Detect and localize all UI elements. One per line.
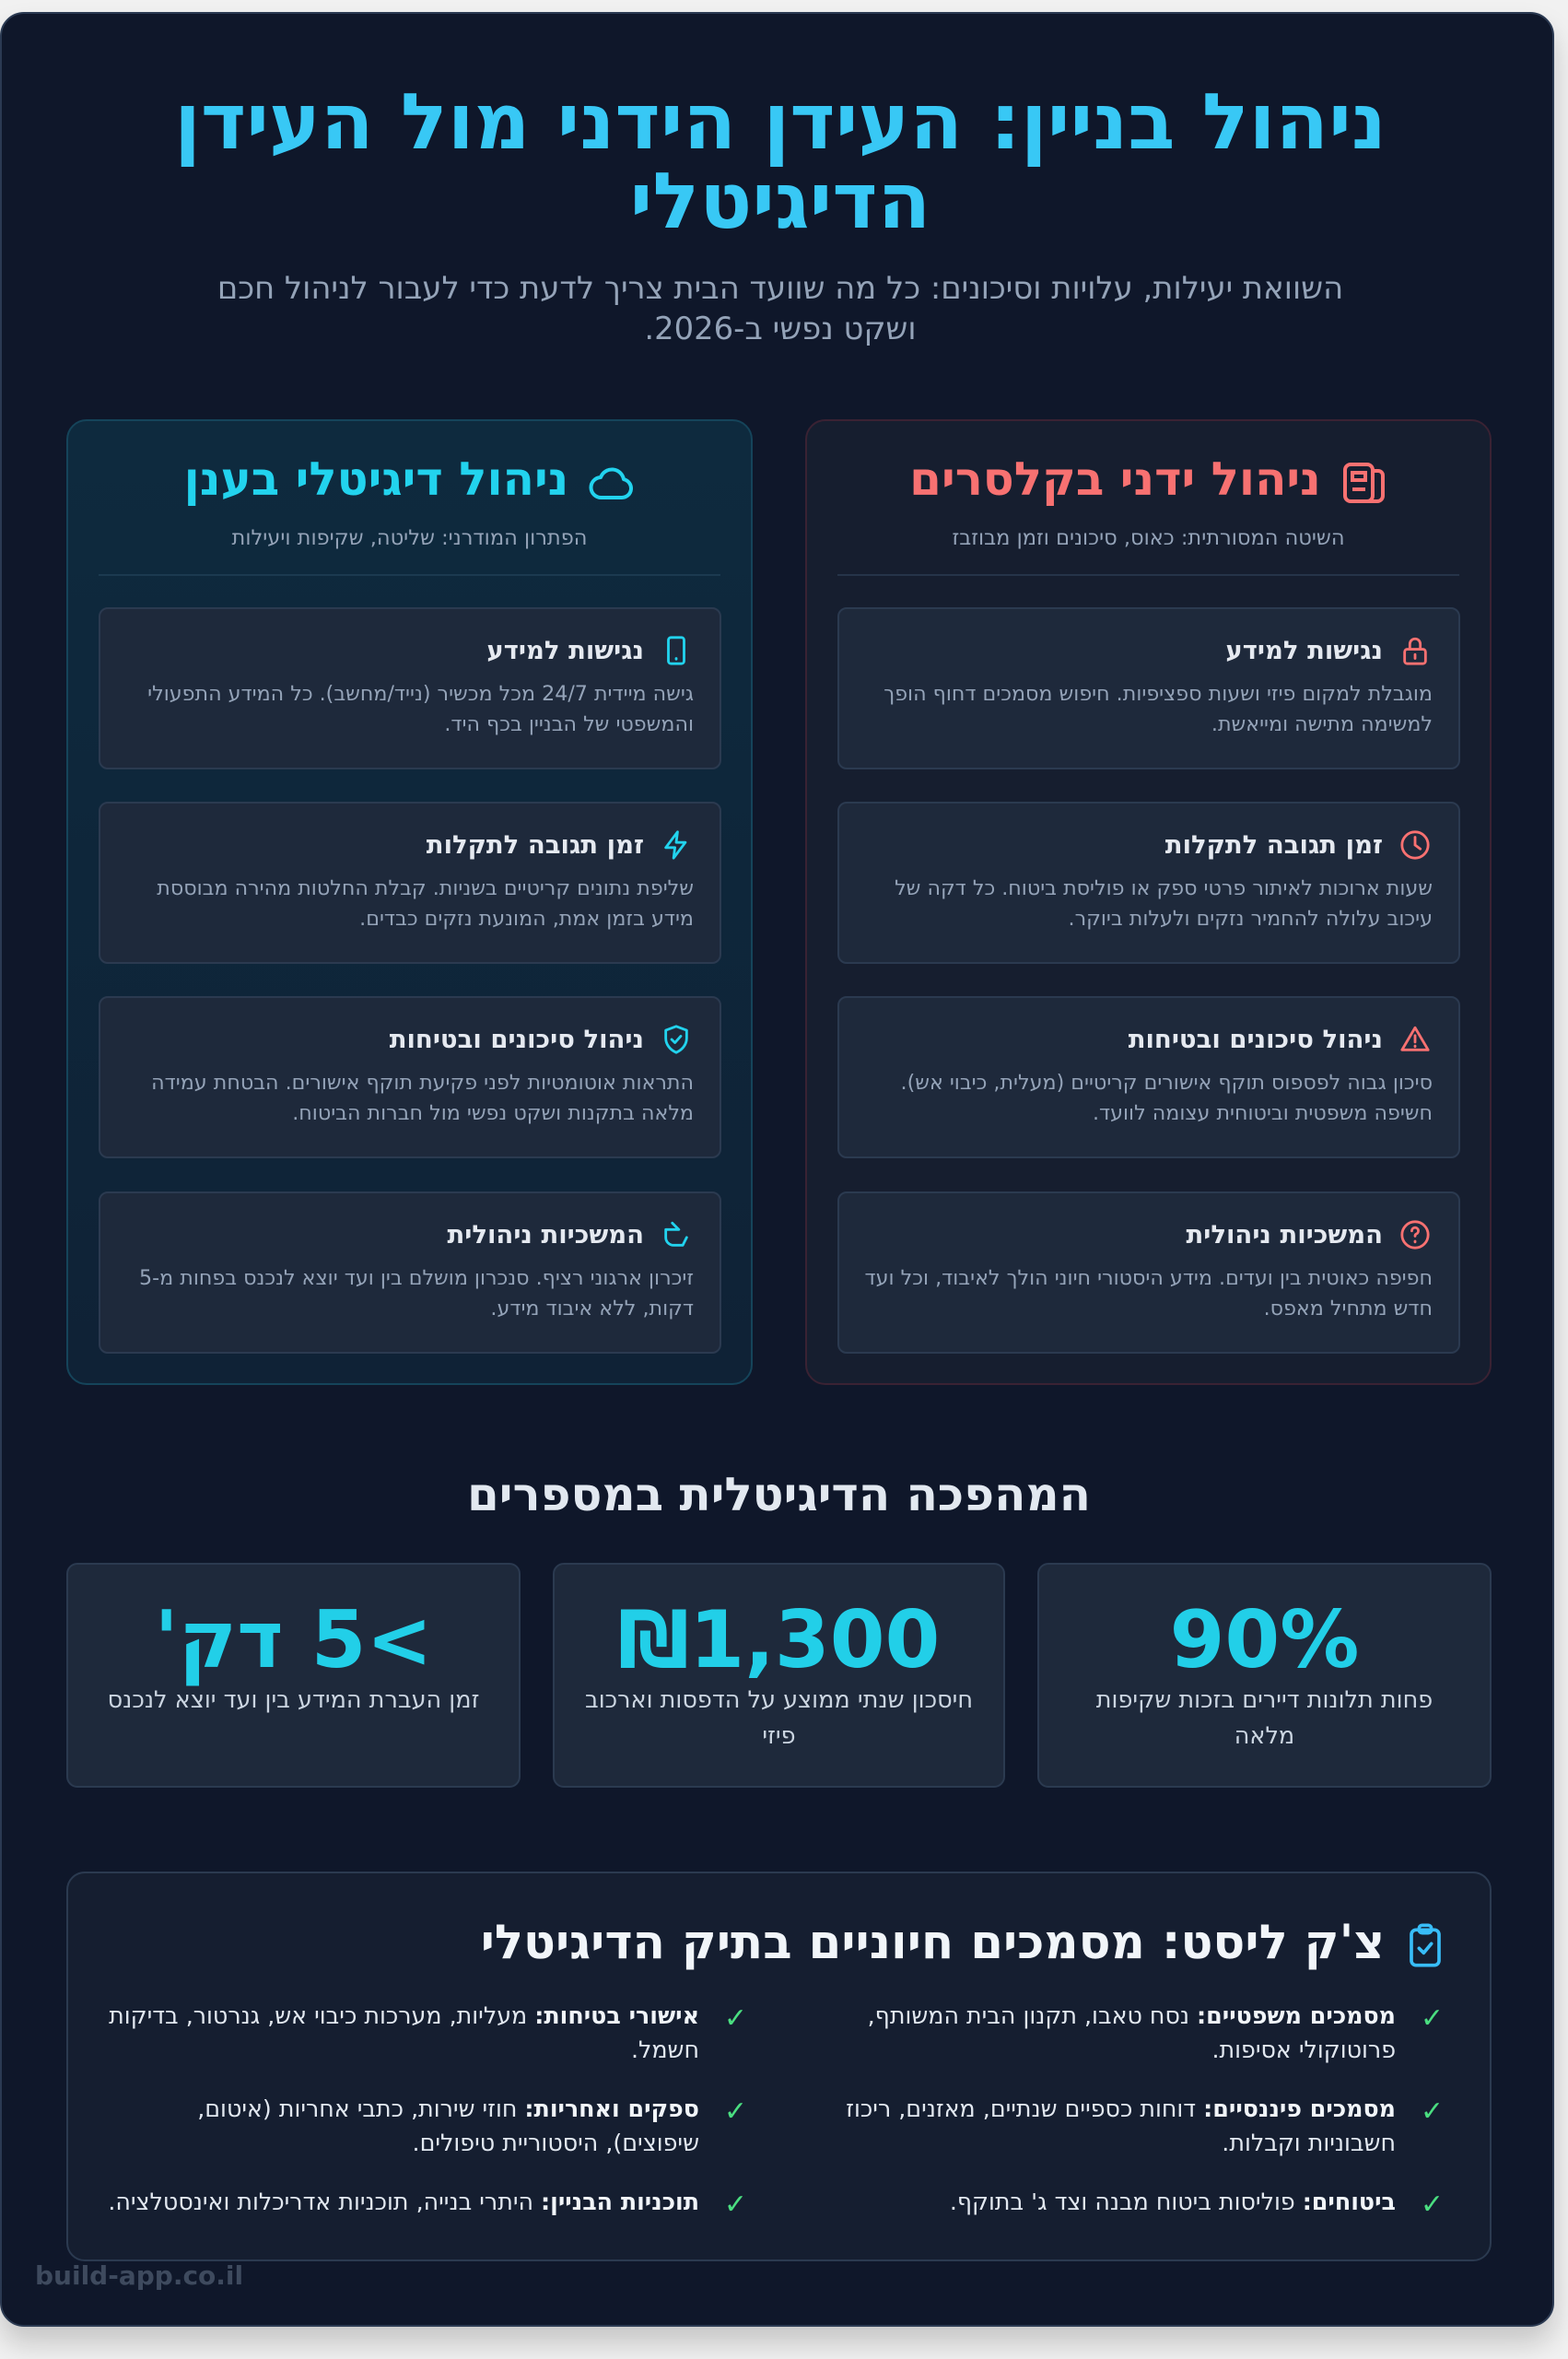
panel: digital: [66, 419, 753, 1385]
stat: 90%: 90%: [1170, 1594, 1359, 1686]
card: access: [99, 607, 721, 769]
stat: 5 min: זמן העברת המידע בין ועד יוצא לנכנס: [108, 1686, 479, 1714]
card: risk: ניהול סיכונים ובטיחות: [1129, 1025, 1383, 1054]
panel: manual: [805, 419, 1492, 1385]
card: continuity: [99, 1191, 721, 1354]
stat: 1300: [553, 1563, 1005, 1788]
watermark: build-app.co.il: [35, 2260, 243, 2291]
card: continuity: [837, 1191, 1460, 1354]
stat: 90%: פחות תלונות דיירים בזכות שקיפות מלאה: [1096, 1686, 1433, 1750]
item: insurance: ✓: [1421, 2189, 1444, 2221]
card: access: מוגבלת למקום פיזי ושעות ספציפיות. חיפוש מסמכים דחוף הופך למשימה מתישה ומייאשת.: [883, 682, 1433, 736]
item: financial: ✓: [1421, 2095, 1444, 2128]
card: continuity: המשכיות ניהולית: [447, 1220, 644, 1250]
card: access: [837, 607, 1460, 769]
card: access: נגישות למידע: [1225, 636, 1383, 665]
card: continuity: המשכיות ניהולית: [1186, 1220, 1383, 1250]
checklist panel: [66, 1872, 1492, 2261]
card: response time: זמן תגובה לתקלות: [1165, 830, 1383, 860]
card: access: נגישות למידע: [486, 636, 644, 665]
card: response time: שעות ארוכות לאיתור פרטי ספק או פוליסת ביטוח. כל דקה של עיכוב עלולה להחמיר נזקים ולעלות ביוקר.: [895, 876, 1433, 931]
item: plans: תוכניות הבניין: היתרי בנייה, תוכניות אדריכלות ואינסטלציה.: [108, 2189, 699, 2215]
panel subheading: השיטה המסורתית: כאוס, סיכונים וזמן מבוזבז: [952, 526, 1345, 550]
card: access: גישה מיידית 24/7 מכל מכשיר (נייד/מחשב). כל המידע התפעולי והמשפטי של הבניין בכף היד.: [147, 682, 694, 736]
card: response time: זמן תגובה לתקלות: [427, 830, 644, 860]
item: financial: מסמכים פיננסיים: דוחות כספיים שנתיים, מאזנים, ריכוז חשבוניות וקבלות.: [846, 2095, 1396, 2156]
item: legal: ✓: [1421, 2002, 1444, 2035]
card: continuity: זיכרון ארגוני רציף. סנכרון מושלם בין ועד יוצא לנכנס בפחות מ-5 דקות, ללא איבוד מידע.: [139, 1266, 694, 1320]
section heading: numbers: המהפכה הדיגיטלית במספרים: [467, 1468, 1091, 1521]
subtitle: השוואת יעילות, עלויות וסיכונים: כל מה שוועד הבית צריך לדעת כדי לעבור לניהול חכם ושקט נפשי ב-2026.: [217, 270, 1343, 346]
checklist heading: צ'ק ליסט: מסמכים חיוניים בתיק הדיגיטלי: [481, 1915, 1385, 1970]
item: suppliers: ספקים ואחריות: חוזי שירות, כתבי אחריות (איטום, שיפוצים), היסטוריית טיפולים.: [197, 2095, 699, 2156]
card: risk: התראות אוטומטיות לפני פקיעת תוקף אישורים. הבטחת עמידה מלאה בתקנות ושקט נפשי מול חברות הביטוח.: [151, 1071, 694, 1125]
item: safety: ✓: [724, 2002, 747, 2035]
card: continuity: חפיפה כאוטית בין ועדים. מידע היסטורי חיוני הולך לאיבוד, וכל ועד חדש מתחיל מאפס.: [865, 1266, 1433, 1320]
stat: 5 min: [66, 1563, 521, 1788]
item: suppliers: ✓: [724, 2095, 747, 2128]
item: safety: אישורי בטיחות: מעליות, מערכות כיבוי אש, גנרטור, בדיקות חשמל.: [109, 2002, 699, 2063]
stat: 1300: חיסכון שנתי ממוצע על הדפסות וארכוב פיזי: [585, 1686, 973, 1750]
item: legal: מסמכים משפטיים: נסח טאבו, תקנון הבית המשותף, פרוטוקולי אסיפות.: [868, 2002, 1396, 2063]
panel subheading: הפתרון המודרני: שליטה, שקיפות ויעילות: [232, 526, 587, 550]
item: insurance: ביטוחים: פוליסות ביטוח מבנה וצד ג' בתוקף.: [950, 2189, 1396, 2215]
item: plans: ✓: [724, 2189, 747, 2221]
card: risk: [99, 996, 721, 1158]
card: response time: [837, 802, 1460, 964]
card: risk: סיכון גבוה לפספוס תוקף אישורים קריטיים (מעלית, כיבוי אש). חשיפה משפטית וביטוחית עצומה לוועד.: [901, 1071, 1433, 1125]
panel heading: digital: ניהול דיגיטלי בענן: [184, 452, 568, 506]
stat: 90%: [1037, 1563, 1492, 1788]
panel heading: manual: ניהול ידני בקלסרים: [909, 452, 1321, 506]
title: ניהול בניין: העידן הידני מול העידן הדיגיטלי: [174, 76, 1387, 246]
card: response time: שליפת נתונים קריטיים בשניות. קבלת החלטות מהירה מבוססת מידע בזמן אמת, המונעת נזקים כבדים.: [157, 876, 694, 931]
stat: 5 min: >5 דק': [154, 1594, 433, 1686]
stat: 1300: ₪1,300: [618, 1594, 940, 1686]
card: risk: [837, 996, 1460, 1158]
card: risk: ניהול סיכונים ובטיחות: [390, 1025, 644, 1054]
card: response time: [99, 802, 721, 964]
